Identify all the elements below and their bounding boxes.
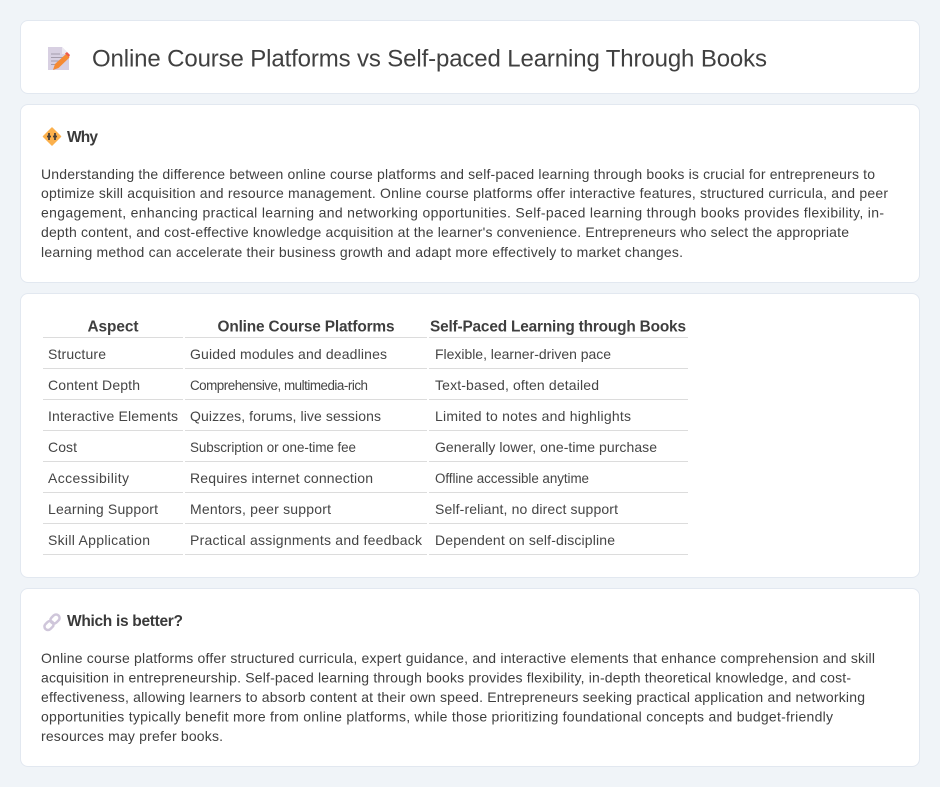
panel: comparison table card (20, 293, 920, 578)
row: cost: Cost (48, 439, 77, 455)
text block: which is better paragraph: acquisition in entrepreneurship. Self-paced learning through books provides flexibility, in-depth theoretical knowledge, and cost- (41, 670, 851, 686)
row: interactive elements: Quizzes, forums, live sessions (190, 408, 381, 424)
row: cost: Generally lower, one-time purchase (435, 439, 657, 455)
row: structure: Guided modules and deadlines (190, 346, 387, 362)
panel: why card (20, 104, 920, 283)
title: Online Course Platforms vs Self-paced Learning Through Books (92, 46, 767, 72)
row: interactive elements: Limited to notes and highlights (435, 408, 631, 424)
row: skill application: Practical assignments and feedback (190, 532, 423, 548)
table header row: Aspect (88, 318, 138, 336)
row: structure: Flexible, learner-driven pace (435, 346, 611, 362)
row: interactive elements (48, 408, 631, 424)
icon: chain link (43, 613, 61, 632)
icon: document with pencil (48, 47, 70, 70)
row: cost: Subscription or one-time fee (190, 440, 356, 455)
row: cost (48, 439, 657, 455)
row: content depth: Comprehensive, multimedia-rich (190, 378, 368, 393)
heading: which is better: Which is better? (67, 613, 183, 630)
text block: which is better paragraph: Online course platforms offer structured curricula, expert guidance, and interactive elements that enhance comprehension and skill (41, 650, 875, 666)
table header row: Online Course Platforms (218, 318, 394, 336)
row: skill application: Dependent on self-discipline (435, 532, 615, 548)
text block: which is better paragraph: effectiveness, allowing learners to absorb content at their own speed. Entrepreneurs seeking practical application and networking (41, 689, 865, 705)
heading: why: Why (67, 129, 98, 146)
table header row: Self-Paced Learning through Books (430, 318, 686, 336)
row: content depth (48, 377, 599, 393)
text block: why paragraph: optimize skill acquisition and resource management. Online course platforms offer interactive features, structured curricula, and peer (41, 185, 888, 201)
text block: why paragraph: engagement, enhancing practical learning and networking opportunities. Self-paced learning through books provides flexibility, in- (41, 204, 884, 220)
text block: why paragraph: Understanding the difference between online course platforms and self-paced learning through books is crucial for entrepreneurs to (41, 166, 875, 182)
row: structure: Structure (48, 346, 106, 362)
text block: which is better paragraph: opportunities typically benefit more from online platforms, while those prioritizing foundational concepts and budget-friendly (41, 708, 833, 724)
row: learning support: Mentors, peer support (190, 501, 331, 517)
table header row (88, 318, 686, 336)
text block: which is better paragraph: resources may prefer books. (41, 728, 223, 744)
row: interactive elements: Interactive Elements (48, 408, 178, 424)
text block: which is better paragraph (41, 650, 875, 744)
row: accessibility (48, 470, 589, 486)
comparison table (43, 318, 688, 555)
text block: why paragraph (41, 166, 888, 260)
row: accessibility: Offline accessible anytime (435, 471, 589, 486)
panel: title card (20, 20, 920, 94)
row: structure (48, 346, 611, 362)
row: content depth: Content Depth (48, 377, 140, 393)
icon: diamond warning sign (44, 128, 60, 145)
row: accessibility: Requires internet connection (190, 470, 373, 486)
text block: why paragraph: depth content, and cost-effective knowledge acquisition at the learner's convenience. Entrepreneurs who select the appropriate (41, 224, 849, 240)
row: learning support: Self-reliant, no direct support (435, 501, 618, 517)
panel: which is better card (20, 588, 920, 767)
row: skill application: Skill Application (48, 532, 150, 548)
text block: why paragraph: learning method can accelerate their business growth and adapt more effectively to market changes. (41, 244, 683, 260)
row: content depth: Text-based, often detailed (435, 377, 599, 393)
row: accessibility: Accessibility (48, 470, 129, 486)
row: learning support: Learning Support (48, 501, 158, 517)
row: learning support (48, 501, 618, 517)
row: skill application (48, 532, 615, 548)
